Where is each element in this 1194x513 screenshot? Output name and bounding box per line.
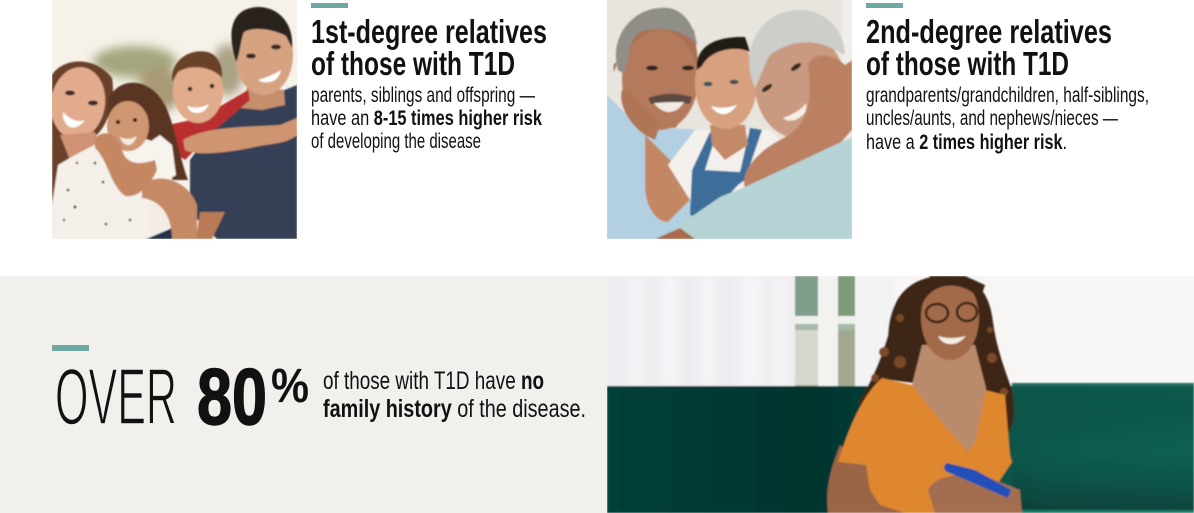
- accent bar: [311, 3, 348, 8]
- woman's blouse: [52, 142, 172, 239]
- big statistic: 80: [197, 352, 267, 441]
- callout: over 80 percent: [52, 345, 586, 441]
- boy's shirt: [168, 90, 250, 160]
- boy's head: [173, 59, 223, 123]
- girl's arm and leg: [95, 133, 157, 196]
- girl's face: [107, 101, 149, 151]
- description: parents, siblings and offspring —: [311, 84, 535, 107]
- boy's arm: [183, 118, 297, 153]
- statement: [323, 367, 586, 423]
- girl's overalls: [690, 128, 762, 218]
- grandmother's hand and arm: [744, 56, 852, 187]
- man's head: [240, 85, 285, 110]
- description: [311, 84, 542, 153]
- girl's shirt: [130, 134, 178, 180]
- description: have an 8-15 times higher risk: [311, 107, 542, 130]
- section: second-degree relatives: [866, 3, 1149, 154]
- hands and insulin pen: [928, 475, 1022, 513]
- big statistic: OVER: [55, 352, 177, 441]
- photo: woman on green sofa with insulin pen: [607, 276, 1194, 513]
- face: [921, 276, 979, 360]
- hair: [858, 276, 1014, 432]
- heading: 1st-degree relatives: [311, 13, 547, 50]
- girl's hair: [108, 83, 188, 180]
- t-shirt: [838, 378, 1012, 513]
- grandfather's hand and girl's arm: [621, 89, 660, 140]
- sofa: [607, 386, 1194, 513]
- accent bar: [52, 345, 89, 351]
- photo: grandparents with granddaughter: [607, 0, 852, 239]
- statement: family history of the disease.: [323, 395, 586, 423]
- heading: [311, 13, 547, 82]
- description: have a 2 times higher risk.: [866, 131, 1067, 154]
- panel: family history statistic background: [0, 276, 607, 513]
- photo: young family piggyback: [46, 0, 297, 239]
- heading: of those with T1D: [311, 45, 515, 82]
- heading: of those with T1D: [866, 45, 1069, 82]
- girl's shirt: [667, 129, 780, 200]
- grandmother's head: [755, 42, 841, 137]
- man's shirt: [190, 85, 297, 239]
- description: of developing the disease: [311, 130, 481, 153]
- arm: [826, 444, 904, 513]
- big statistic: %: [271, 360, 309, 413]
- woman's face: [52, 66, 106, 136]
- heading: 2nd-degree relatives: [866, 13, 1112, 50]
- woman's hair: [52, 62, 113, 208]
- grandfather's head: [613, 20, 698, 128]
- grandmother's sweater: [660, 137, 852, 239]
- girl's head: [710, 125, 748, 160]
- statement: of those with T1D have no: [323, 367, 544, 395]
- neck and chest: [912, 345, 986, 452]
- heading: [866, 13, 1112, 82]
- accent bar: [866, 3, 903, 8]
- section: first-degree relatives: [311, 3, 547, 153]
- grandfather's shirt: [607, 95, 700, 239]
- description: [866, 84, 1149, 154]
